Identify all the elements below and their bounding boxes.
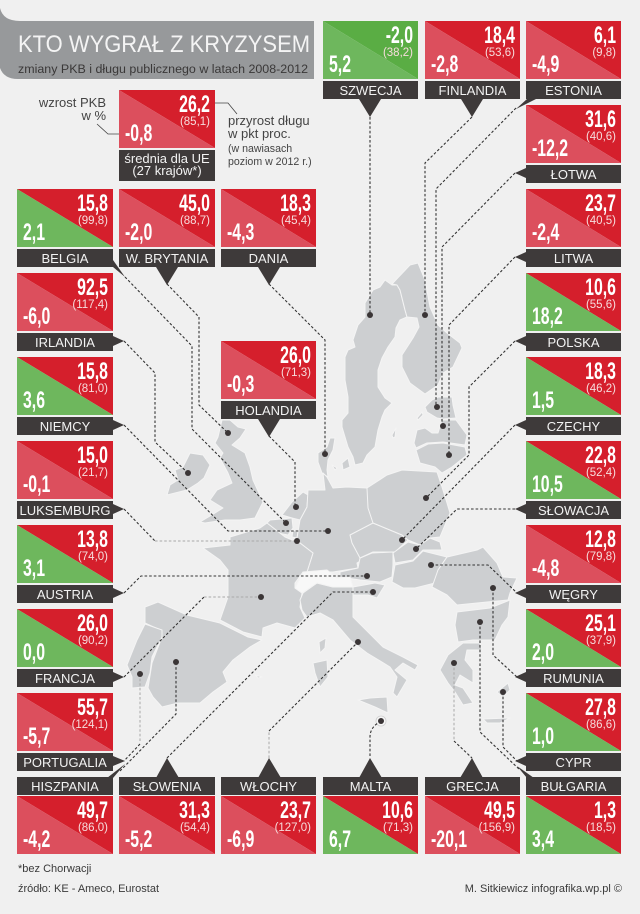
tile: Estonia: ESTONIA [545, 83, 602, 98]
tile: Cypr: 27,8 [585, 695, 616, 721]
tile: Dania: -4,3 [227, 220, 254, 246]
tile: Litwa: -2,4 [532, 220, 560, 246]
footnote: *bez Chorwacji [18, 863, 91, 875]
tile: Estonia [516, 21, 621, 109]
tile: Estonia: -4,9 [532, 52, 559, 78]
tile: Austria: AUSTRIA [37, 587, 93, 602]
tile: Grecja: -20,1 [431, 827, 467, 853]
tile: Słowenia: (54,4) [180, 822, 210, 834]
tile: Węgry: WĘGRY [549, 587, 598, 602]
tile: Dania: 18,3 [280, 191, 311, 217]
tile: Bułgaria: BUŁGARIA [541, 779, 607, 794]
tile: Czechy [515, 357, 621, 435]
country location dots [137, 312, 506, 724]
tile: Słowacja: (52,4) [586, 467, 616, 479]
tile: Portugalia: -5,7 [23, 724, 50, 750]
tile: Słowacja [515, 441, 621, 519]
tile: Cypr: CYPR [555, 755, 592, 770]
tile: Holandia: HOLANDIA [235, 403, 302, 418]
tile: Słowacja: SŁOWACJA [538, 503, 609, 518]
legend: EU average: poziom w 2012 r.) [228, 156, 312, 168]
tile: Polska: POLSKA [547, 335, 600, 350]
tile: Hiszpania: (86,0) [78, 822, 108, 834]
legend: EU average: średnia dla UE [124, 151, 210, 166]
tile: W. Brytania: (88,7) [180, 215, 210, 227]
tile: Austria [17, 525, 124, 603]
tile: Czechy: 1,5 [532, 388, 554, 414]
tile: Malta: MALTA [350, 779, 392, 794]
tile: Hiszpania: HISZPANIA [31, 779, 99, 794]
tile: W. Brytania: W. BRYTANIA [126, 251, 209, 266]
tile: Węgry: -4,8 [532, 556, 559, 582]
tile: Słowenia [119, 758, 215, 854]
tile: Bułgaria: (18,5) [586, 822, 616, 834]
tile: Portugalia: (124,1) [72, 719, 108, 731]
tile: Słowenia: -5,2 [125, 827, 152, 853]
tile: Szwecja: (38,2) [383, 47, 413, 59]
legend: EU average: w % [80, 108, 106, 123]
legend: EU average: 26,2 [179, 92, 210, 118]
tile: Francja: 0,0 [23, 640, 45, 666]
tile: Belgia: 2,1 [23, 220, 45, 246]
tile: Słowacja: 22,8 [585, 443, 616, 469]
tile: Malta: (71,3) [383, 822, 413, 834]
tile: Grecja: (156,9) [479, 822, 515, 834]
legend: EU average: (85,1) [180, 116, 210, 128]
tile: Grecja: 49,5 [484, 798, 515, 824]
legend: EU average: w pkt proc. [227, 126, 291, 141]
tile: Austria: 3,1 [23, 556, 45, 582]
tile: Luksemburg: -0,1 [23, 472, 50, 498]
tile: Węgry: 12,8 [585, 527, 616, 553]
tile: Irlandia [17, 273, 124, 351]
tile: Polska [515, 273, 621, 351]
tile: Łotwa: (40,6) [586, 131, 616, 143]
legend: EU average: (27 krajów*) [132, 163, 202, 178]
tile: Litwa: (40,5) [586, 215, 616, 227]
tile: Francja: 26,0 [77, 611, 108, 637]
tile: Łotwa [515, 105, 621, 183]
legend: EU average: (w nawiasach [228, 143, 292, 155]
tile: Malta [323, 758, 418, 854]
tile: Grecja [425, 758, 520, 854]
tile: Szwecja: -2,0 [386, 23, 413, 49]
tile: Niemcy: 3,6 [23, 388, 45, 414]
tile: Dania: (45,4) [281, 215, 311, 227]
legend: EU average [38, 90, 312, 181]
tile: Słowenia: SŁOWENIA [133, 779, 202, 794]
tile: W. Brytania [119, 189, 215, 285]
tile: Węgry [515, 525, 621, 603]
tile: Malta: 6,7 [329, 827, 351, 853]
tile: Czechy: CZECHY [547, 419, 601, 434]
tile: Niemcy: 15,8 [77, 359, 108, 385]
tile: Finlandia: FINLANDIA [439, 83, 507, 98]
tile: Hiszpania [17, 764, 125, 854]
tile: Luksemburg: (21,7) [78, 467, 108, 479]
tile: Węgry: (79,8) [586, 551, 616, 563]
tile: Luksemburg: 15,0 [77, 443, 108, 469]
tile: Portugalia: 55,7 [77, 695, 108, 721]
tile: Rumunia: 2,0 [532, 640, 554, 666]
tile: Cypr: (86,6) [586, 719, 616, 731]
tile: Niemcy [17, 357, 124, 435]
tile: Rumunia: RUMUNIA [543, 671, 604, 686]
tile: Francja [17, 609, 124, 687]
tile: Włochy: WŁOCHY [240, 779, 297, 794]
tile: Francja: FRANCJA [35, 671, 95, 686]
tile: Irlandia: 92,5 [77, 275, 108, 301]
tile: Bułgaria [517, 766, 621, 854]
tile: Szwecja [323, 21, 418, 117]
title banner: zmiany PKB i długu publicznego w latach 2008-2012 [18, 62, 308, 76]
tile: Portugalia: PORTUGALIA [23, 755, 107, 770]
tile: Łotwa: 31,6 [585, 107, 616, 133]
tile: Litwa [515, 189, 621, 267]
tile: Włochy: -6,9 [227, 827, 254, 853]
title banner [0, 8, 314, 79]
tile: Irlandia: (117,4) [72, 299, 108, 311]
tile: Luksemburg [17, 441, 124, 519]
author credit: M. Sitkiewicz infografika.wp.pl © [465, 883, 622, 895]
tile: Holandia [221, 341, 316, 437]
tile: Łotwa: ŁOTWA [551, 167, 597, 182]
tile: Belgia [17, 189, 125, 277]
tile: W. Brytania: 45,0 [179, 191, 210, 217]
tile: Austria: (74,0) [78, 551, 108, 563]
tile: Litwa: LITWA [554, 251, 593, 266]
tile: Belgia: BELGIA [42, 251, 89, 266]
tile: Hiszpania: -4,2 [23, 827, 50, 853]
tile: Grecja: GRECJA [446, 779, 499, 794]
tile: Finlandia: (53,6) [485, 47, 515, 59]
tile: Szwecja: SZWECJA [339, 83, 402, 98]
tile: Rumunia [515, 609, 621, 687]
tile: Łotwa: -12,2 [532, 136, 568, 162]
tile: Polska: (55,6) [586, 299, 616, 311]
tile: Finlandia [425, 21, 520, 117]
tile: Polska: 10,6 [585, 275, 616, 301]
tile: Irlandia: IRLANDIA [35, 335, 95, 350]
tile: Słowacja: 10,5 [532, 472, 563, 498]
source: źródło: KE - Ameco, Eurostat [18, 883, 159, 895]
tile: Dania: DANIA [249, 251, 289, 266]
tile: Szwecja: 5,2 [329, 52, 351, 78]
tile: Czechy: (46,2) [586, 383, 616, 395]
tile: Malta: 10,6 [382, 798, 413, 824]
tile: Austria: 13,8 [77, 527, 108, 553]
tile: Polska: 18,2 [532, 304, 563, 330]
legend: EU average: wzrost PKB [38, 95, 106, 110]
tile: Włochy: (127,0) [275, 822, 311, 834]
leader lines [120, 108, 520, 771]
tile: Litwa: 23,7 [585, 191, 616, 217]
tile: Słowenia: 31,3 [179, 798, 210, 824]
tile: Rumunia: (37,9) [586, 635, 616, 647]
tile: Finlandia: 18,4 [484, 23, 516, 49]
tile: Estonia: 6,1 [594, 23, 616, 49]
tile: Włochy: 23,7 [280, 798, 311, 824]
tile: Portugalia [17, 693, 125, 771]
tile: Holandia: -0,3 [227, 372, 254, 398]
tile: Francja: (90,2) [78, 635, 108, 647]
tile: Cypr [515, 693, 621, 771]
tile: W. Brytania: -2,0 [125, 220, 152, 246]
legend: EU average: przyrost długu [228, 113, 310, 128]
legend: EU average: -0,8 [125, 121, 152, 147]
map of the European Union [127, 263, 517, 726]
tile: Finlandia: -2,8 [431, 52, 458, 78]
tile: Irlandia: -6,0 [23, 304, 50, 330]
tile: Bułgaria: 1,3 [594, 798, 616, 824]
tile: Hiszpania: 49,7 [77, 798, 108, 824]
tile: Cypr: 1,0 [532, 724, 554, 750]
tile: Belgia: 15,8 [77, 191, 108, 217]
tile: Bułgaria: 3,4 [532, 827, 555, 853]
tile: Rumunia: 25,1 [585, 611, 616, 637]
tile: Niemcy: NIEMCY [40, 419, 91, 434]
tile: Holandia: (71,3) [281, 367, 311, 379]
tile: Luksemburg: LUKSEMBURG [19, 503, 111, 518]
tile: Czechy: 18,3 [585, 359, 616, 385]
tile: Dania [221, 189, 316, 285]
tile: Niemcy: (81,0) [78, 383, 108, 395]
tile: Holandia: 26,0 [280, 343, 311, 369]
tile: Estonia: (9,8) [592, 47, 616, 59]
tile: Belgia: (99,8) [78, 215, 108, 227]
title banner: KTO WYGRAŁ Z KRYZYSEM [18, 31, 310, 58]
tile: Włochy [221, 758, 316, 854]
